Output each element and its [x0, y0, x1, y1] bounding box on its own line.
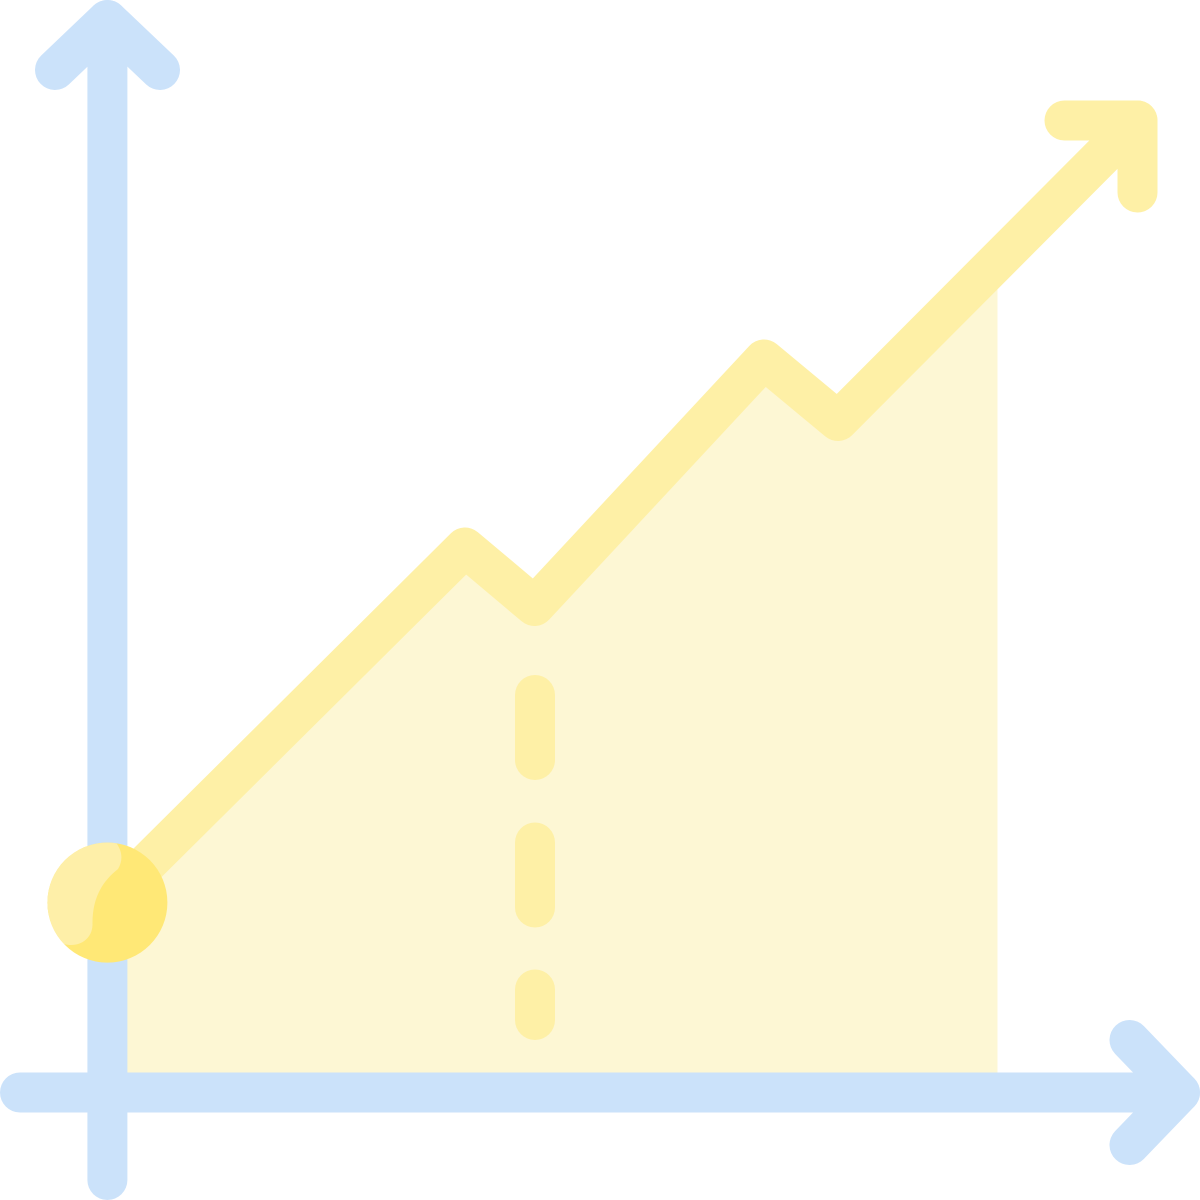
trend line arrow	[107, 120, 1137, 903]
vertical axis with arrowhead	[55, 20, 160, 1180]
horizontal axis with arrowhead	[20, 1040, 1180, 1145]
start point marker	[47, 842, 168, 963]
dashed vertical marker	[515, 695, 555, 1020]
area under trend line	[127, 287, 998, 1073]
